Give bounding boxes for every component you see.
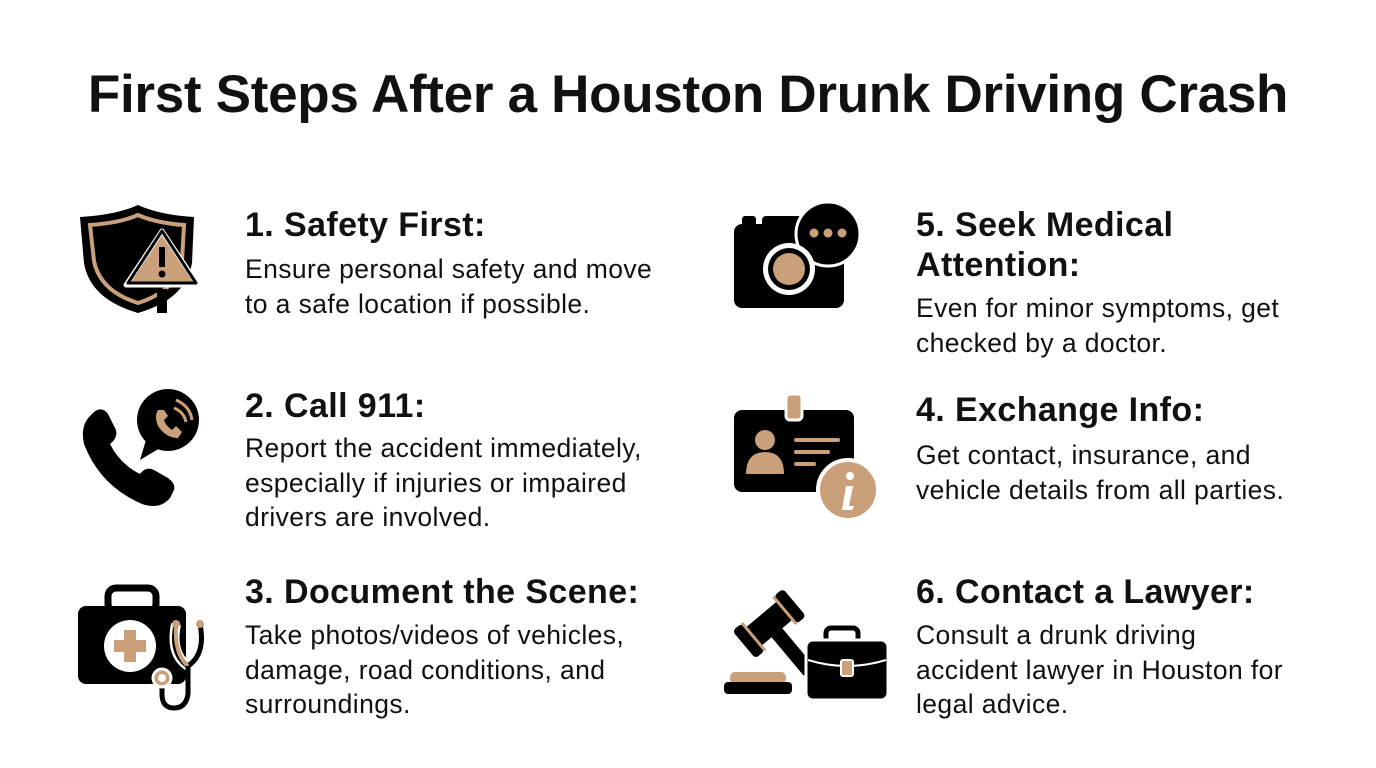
text 3: [245, 620, 624, 719]
text 2: especially if injuries or impaired: [245, 468, 627, 498]
icon: phone: [82, 389, 199, 506]
title: First Steps After a Houston Drunk Driving Crash: [88, 65, 1288, 124]
text 2: [245, 433, 642, 532]
text 6: Consult a drunk driving: [916, 620, 1196, 650]
text 4: [916, 440, 1284, 505]
heading 2: 2. Call 911:: [245, 387, 426, 425]
icon: camera: [734, 204, 858, 308]
heading 6: 6. Contact a Lawyer:: [916, 573, 1255, 611]
text 3: damage, road conditions, and: [245, 655, 605, 685]
icon: shield warning: [80, 205, 198, 313]
text 4: Get contact, insurance, and: [916, 440, 1251, 470]
text 2: drivers are involved.: [245, 502, 491, 532]
text 5: Even for minor symptoms, get: [916, 293, 1279, 323]
text 3: Take photos/videos of vehicles,: [245, 620, 624, 650]
text 6: [916, 620, 1283, 719]
text 1: to a safe location if possible.: [245, 289, 590, 319]
text 5: checked by a doctor.: [916, 328, 1167, 358]
text 4: vehicle details from all parties.: [916, 475, 1284, 505]
text 1: [245, 254, 652, 319]
text 6: accident lawyer in Houston for: [916, 655, 1283, 685]
heading 5: Attention:: [916, 246, 1081, 284]
icon: medical kit: [78, 584, 204, 710]
text 2: Report the accident immediately,: [245, 433, 642, 463]
heading 4: 4. Exchange Info:: [916, 391, 1204, 429]
text 6: legal advice.: [916, 689, 1069, 719]
heading 3: 3. Document the Scene:: [245, 573, 639, 611]
heading 5: 5. Seek Medical: [916, 206, 1173, 244]
heading 5: [916, 206, 1173, 284]
icon: ID card info: [734, 396, 876, 518]
text 5: [916, 293, 1279, 358]
heading 1: 1. Safety First:: [245, 206, 486, 244]
text 1: Ensure personal safety and move: [245, 254, 652, 284]
text 3: surroundings.: [245, 689, 411, 719]
icon: gavel and briefcase: [724, 590, 886, 698]
